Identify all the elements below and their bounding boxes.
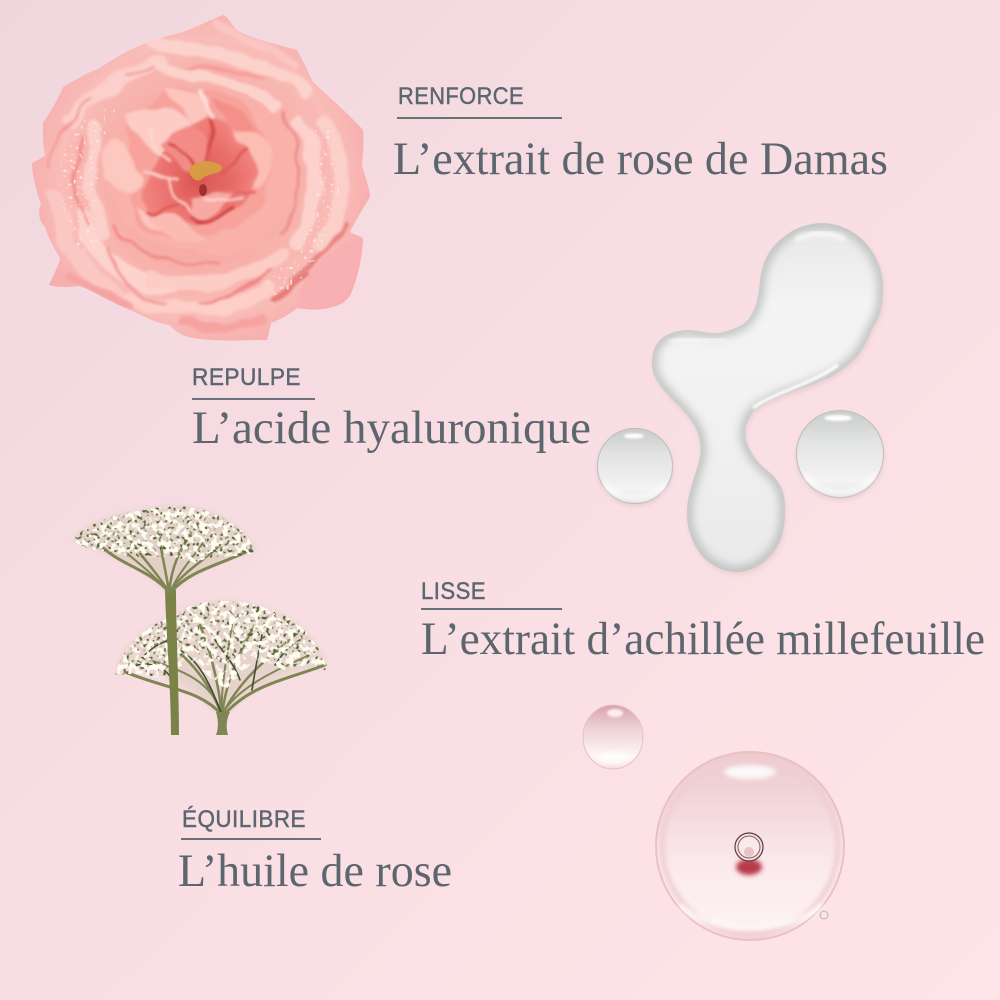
front stem bbox=[165, 590, 179, 735]
image: left gel droplet bbox=[597, 428, 673, 506]
light outer petal bbox=[306, 266, 318, 278]
label: RENFORCE: RENFORCE bbox=[398, 83, 524, 110]
heading: rose oil: L’huile de rose bbox=[178, 845, 452, 897]
heading: hyaluronic acid: L’acide hyaluronique bbox=[192, 402, 591, 454]
dew drops bbox=[59, 108, 342, 305]
heading: rose extract: L’extrait de rose de Damas bbox=[393, 133, 888, 185]
image: yarrow plant bbox=[73, 506, 328, 735]
stamens bbox=[188, 161, 222, 196]
image: Damask rose bbox=[32, 15, 370, 340]
central ripple bbox=[735, 833, 763, 875]
image: small rose oil droplet bbox=[583, 705, 643, 769]
back umbel base tone bbox=[115, 601, 328, 712]
front umbel base tone bbox=[73, 506, 256, 592]
inner petals bbox=[100, 85, 295, 252]
image: large rose oil droplet bbox=[656, 752, 844, 940]
front umbel florets bbox=[73, 506, 256, 563]
heading: yarrow extract: L’extrait d’achillée millefeuille bbox=[421, 613, 985, 665]
back umbel branches bbox=[125, 625, 325, 715]
shadow bbox=[653, 226, 884, 575]
back umbel florets bbox=[115, 601, 328, 680]
image: right gel droplet bbox=[796, 410, 884, 500]
label: LISSE: LISSE bbox=[421, 578, 486, 605]
label: REPULPE: REPULPE bbox=[192, 364, 301, 391]
label: ÉQUILIBRE: ÉQUILIBRE bbox=[182, 806, 306, 833]
image: hyaluronic acid gel bbox=[652, 223, 884, 575]
image: tiny droplet bbox=[820, 911, 828, 919]
front umbel branches bbox=[100, 535, 250, 592]
outer petal crescents bbox=[50, 25, 345, 327]
